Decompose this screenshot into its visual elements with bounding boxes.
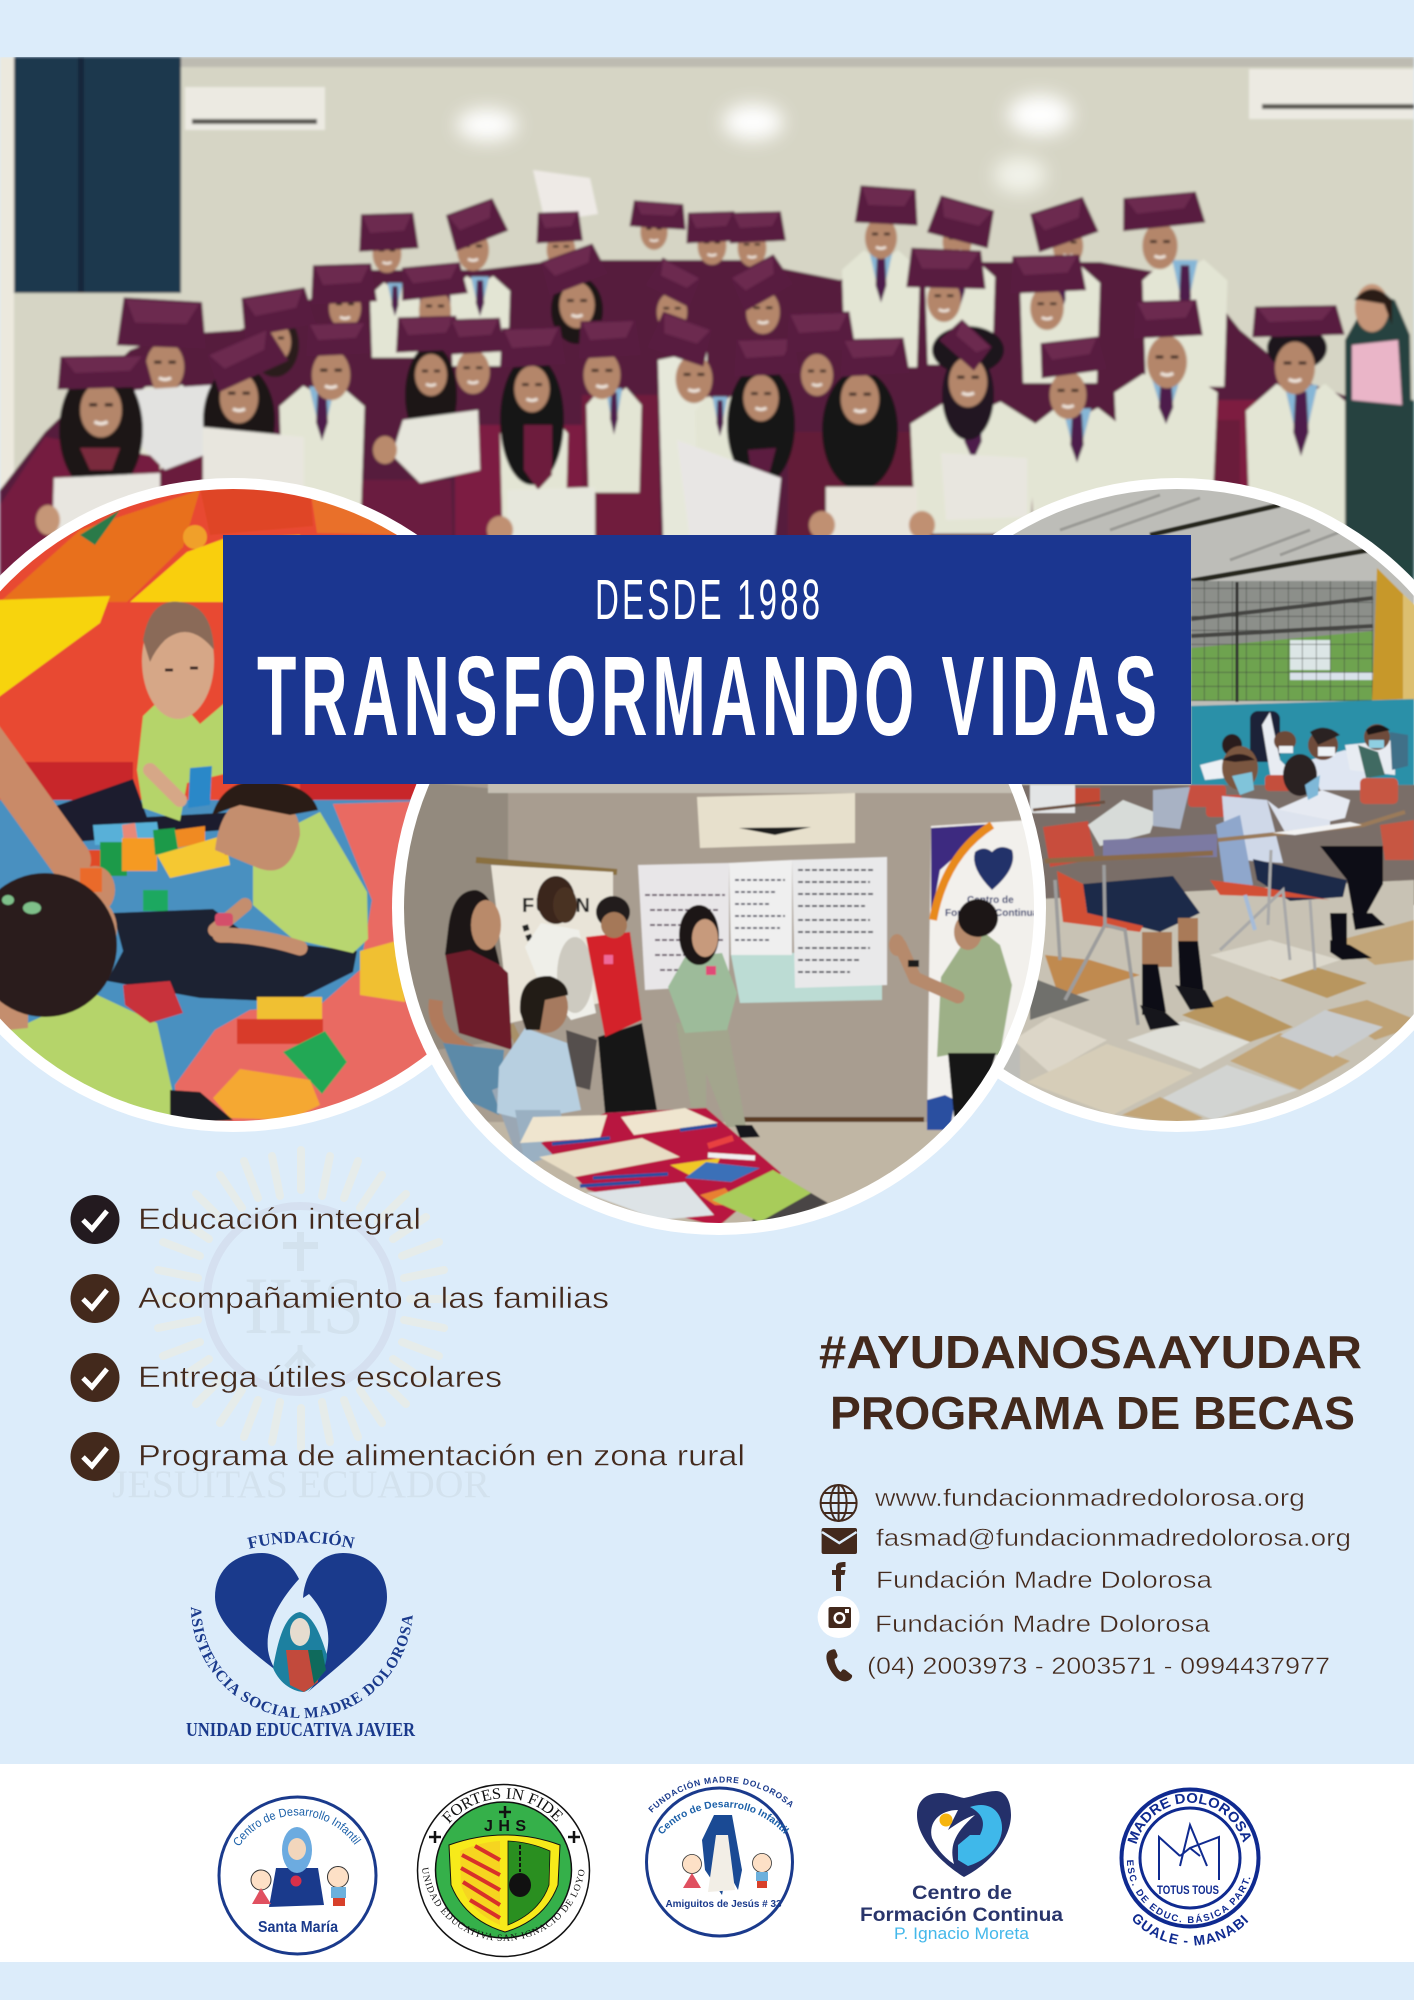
photo circle: classroom students bbox=[992, 478, 1414, 1132]
logo: Santa María bbox=[218, 1796, 378, 1956]
logo: Centro de Formación Continua bbox=[860, 1791, 1063, 1943]
photo circle: workshop with flipcharts: Continua bbox=[995, 908, 1039, 919]
logo: Amiguitos de Jesús bbox=[645, 1776, 794, 1938]
watermark: Jesuitas Ecuador: JESUITAS ECUADOR bbox=[112, 1463, 490, 1506]
checklist bbox=[70, 1195, 745, 1481]
logo: Madre Dolorosa Guale: GUALE - MANABI bbox=[1132, 1914, 1248, 1946]
watermark: Jesuitas Ecuador bbox=[112, 1150, 490, 1506]
logo: Santa María: Santa María bbox=[258, 1919, 338, 1936]
logo text: fundación: FUNDACIÓN bbox=[246, 1530, 356, 1549]
logo: Madre Dolorosa Guale: TOTUS TOUS bbox=[1157, 1883, 1219, 1897]
title banner bbox=[223, 535, 1191, 784]
photo: graduates group bbox=[0, 57, 1414, 617]
banner headline: TRANSFORMANDO VIDAS bbox=[257, 634, 1157, 760]
photo circle: workshop with flipcharts: For bbox=[945, 908, 961, 919]
logo: Centro de Formación Continua: Formación Continua bbox=[860, 1905, 1063, 1926]
contact: email: fasmad@fundacionmadredolorosa.org bbox=[876, 1525, 1351, 1552]
contact block bbox=[818, 1485, 1351, 1681]
contact: phone: (04) 2003973 - 2003571 - 0994437977 bbox=[867, 1653, 1330, 1680]
photo circle: children playing with blocks bbox=[0, 478, 432, 1132]
white logo band bbox=[0, 1764, 1414, 1962]
logo: Amiguitos de Jesús: Amiguitos de Jesús # 33 bbox=[666, 1898, 782, 1910]
list item 4: Programa de alimentación en zona rural bbox=[138, 1440, 745, 1472]
icon: instagram bbox=[818, 1596, 860, 1638]
logo: Fundación Asistencia Social Madre Dolorosa bbox=[186, 1530, 416, 1741]
photo circle: workshop with flipcharts: FU ON bbox=[522, 895, 590, 917]
logo: Centro de Formación Continua: Centro de bbox=[912, 1883, 1012, 1904]
photo circle: workshop with flipcharts bbox=[392, 784, 1046, 1235]
banner subtitle: DESDE 1988 bbox=[595, 568, 820, 631]
contact: web: www.fundacionmadredolorosa.org bbox=[874, 1485, 1305, 1512]
icon: mail bbox=[822, 1528, 857, 1554]
list item 1: Educación integral bbox=[138, 1203, 421, 1236]
icon: globe bbox=[821, 1485, 857, 1521]
logo text: asistencia: ASISTENCIA SOCIAL MADRE DOLOROSA bbox=[190, 1607, 413, 1718]
logo: Unidad Educativa San Ignacio de Loyola: JHS bbox=[484, 1818, 526, 1835]
icon: check 1 bbox=[70, 1195, 120, 1244]
heading: hashtag: #AYUDANOSAAYUDAR bbox=[819, 1326, 1362, 1378]
icon: check 3 bbox=[70, 1353, 120, 1402]
logo: Madre Dolorosa Guale: ESC. DE EDUC. BÁSICA PART. bbox=[1126, 1860, 1250, 1923]
logo: Amiguitos de Jesús: FUNDACIÓN MADRE DOLOROSA bbox=[648, 1776, 793, 1813]
icon: check 4 bbox=[70, 1432, 120, 1481]
heading: programa de becas: PROGRAMA DE BECAS bbox=[830, 1387, 1355, 1439]
list item 3: Entrega útiles escolares bbox=[138, 1361, 502, 1394]
icon: phone bbox=[826, 1649, 852, 1681]
contact: instagram: Fundación Madre Dolorosa bbox=[875, 1611, 1210, 1638]
photo circle: workshop with flipcharts: Centro de bbox=[967, 895, 1014, 906]
icon: facebook bbox=[832, 1562, 846, 1591]
logo: Unidad Educativa San Ignacio de Loyola: FORTES IN FIDE bbox=[442, 1788, 564, 1824]
logo: Unidad Educativa San Ignacio de Loyola bbox=[416, 1784, 590, 1958]
logo: Amiguitos de Jesús: Centro de Desarrollo Infantil bbox=[658, 1802, 790, 1834]
watermark: Jesuitas Ecuador: IHS bbox=[244, 1260, 364, 1351]
logo: Madre Dolorosa Guale bbox=[1120, 1788, 1260, 1946]
logo: Madre Dolorosa Guale: MADRE DOLOROSA bbox=[1127, 1793, 1251, 1844]
logo: Centro de Formación Continua: P. Ignacio Moreta bbox=[894, 1924, 1030, 1943]
logo: Unidad Educativa San Ignacio de Loyola: UNIDAD EDUCATIVA SAN IGNACIO DE LOYOLA bbox=[422, 1867, 584, 1941]
contact: facebook: Fundación Madre Dolorosa bbox=[876, 1567, 1212, 1594]
logo text: unidad educativa: UNIDAD EDUCATIVA JAVIER bbox=[186, 1719, 415, 1741]
icon: check 2 bbox=[70, 1274, 120, 1323]
list item 2: Acompañamiento a las familias bbox=[138, 1282, 609, 1315]
logo: Santa María: Centro de Desarrollo Infantil bbox=[234, 1808, 362, 1846]
